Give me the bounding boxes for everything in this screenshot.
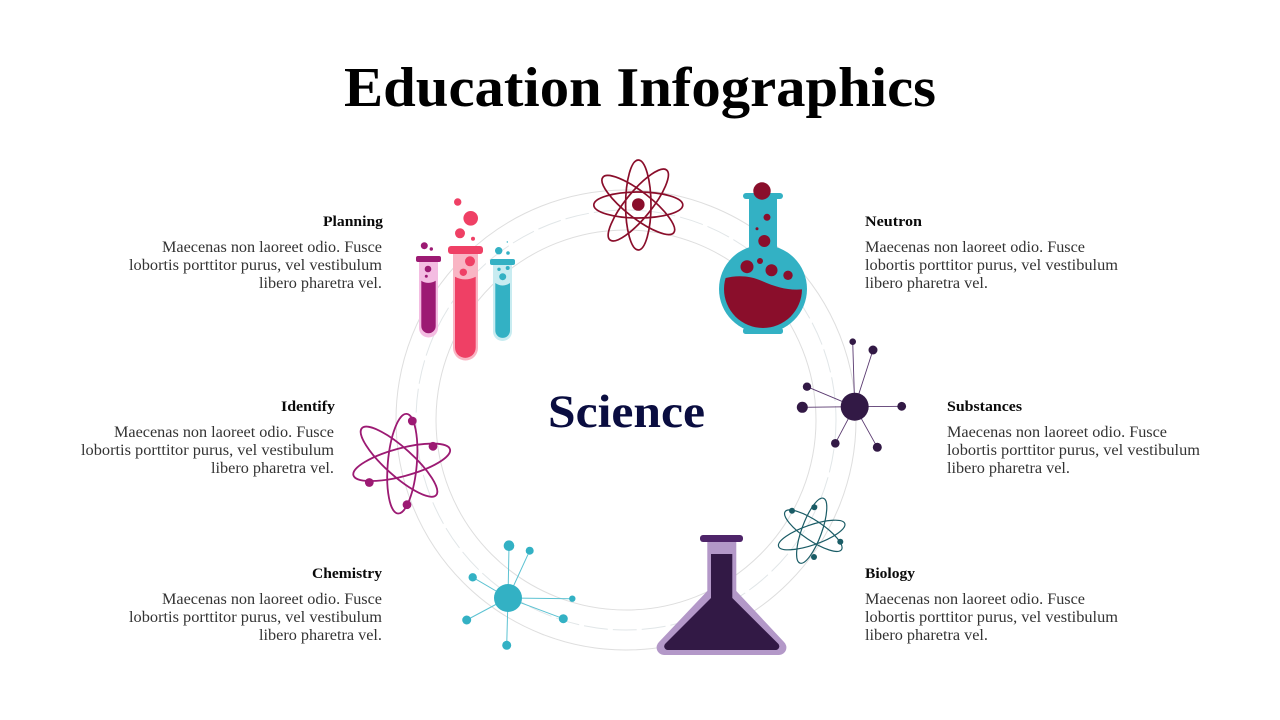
- text block: Biology: [865, 566, 1119, 644]
- text block: Substances: libero pharetra vel.: [947, 460, 1070, 477]
- text block: Planning: Planning: [323, 214, 384, 230]
- text block: Biology: libero pharetra vel.: [865, 627, 988, 644]
- title: Education Infographics: [344, 57, 936, 119]
- text block: Biology: lobortis porttitor purus, vel vestibulum: [865, 609, 1119, 626]
- text block: Identify: Identify: [281, 399, 336, 415]
- text block: Substances: Maecenas non laoreet odio. Fusce: [947, 424, 1167, 441]
- center label: Science: Science: [548, 386, 705, 438]
- text block: Identify: Maecenas non laoreet odio. Fusce: [114, 424, 334, 441]
- text block: Identify: libero pharetra vel.: [211, 460, 334, 477]
- text block: Planning: Maecenas non laoreet odio. Fusce: [162, 239, 382, 256]
- text block: Identify: lobortis porttitor purus, vel vestibulum: [81, 442, 335, 459]
- icon: cyan molecule: [462, 540, 576, 650]
- text block: Chemistry: Maecenas non laoreet odio. Fusce: [162, 591, 382, 608]
- icon: test tubes: [416, 198, 515, 360]
- icon: red atom: [594, 160, 683, 250]
- icon: red test tube: [448, 198, 483, 360]
- icon: magenta atom: [350, 413, 454, 515]
- text block: Biology: Biology: [865, 566, 916, 582]
- text block: Neutron: Maecenas non laoreet odio. Fusce: [865, 239, 1085, 256]
- text block: Substances: [947, 399, 1201, 477]
- icon: teal atom: [775, 495, 848, 567]
- text block: Neutron: lobortis porttitor purus, vel vestibulum: [865, 257, 1119, 274]
- text block: Chemistry: Chemistry: [312, 566, 383, 582]
- icon: teal test tube: [490, 241, 515, 341]
- text block: Neutron: Neutron: [865, 214, 923, 230]
- text block: Chemistry: libero pharetra vel.: [259, 627, 382, 644]
- text block: Chemistry: lobortis porttitor purus, vel vestibulum: [129, 609, 383, 626]
- text block: Planning: [129, 214, 384, 292]
- text block: Biology: Maecenas non laoreet odio. Fusce: [865, 591, 1085, 608]
- icon: purple molecule: [797, 338, 906, 452]
- text block: Planning: libero pharetra vel.: [259, 275, 382, 292]
- icon: purple test tube: [416, 242, 441, 338]
- text block: Identify: [81, 399, 336, 477]
- text block: Chemistry: [129, 566, 383, 644]
- icon: conical flask: [657, 535, 786, 655]
- text block: Substances: lobortis porttitor purus, vel vestibulum: [947, 442, 1201, 459]
- text block: Neutron: libero pharetra vel.: [865, 275, 988, 292]
- icon: round flask: [719, 182, 807, 334]
- text block: Neutron: [865, 214, 1119, 292]
- concentric rings: [396, 190, 856, 650]
- text block: Substances: Substances: [947, 399, 1022, 415]
- text block: Planning: lobortis porttitor purus, vel vestibulum: [129, 257, 383, 274]
